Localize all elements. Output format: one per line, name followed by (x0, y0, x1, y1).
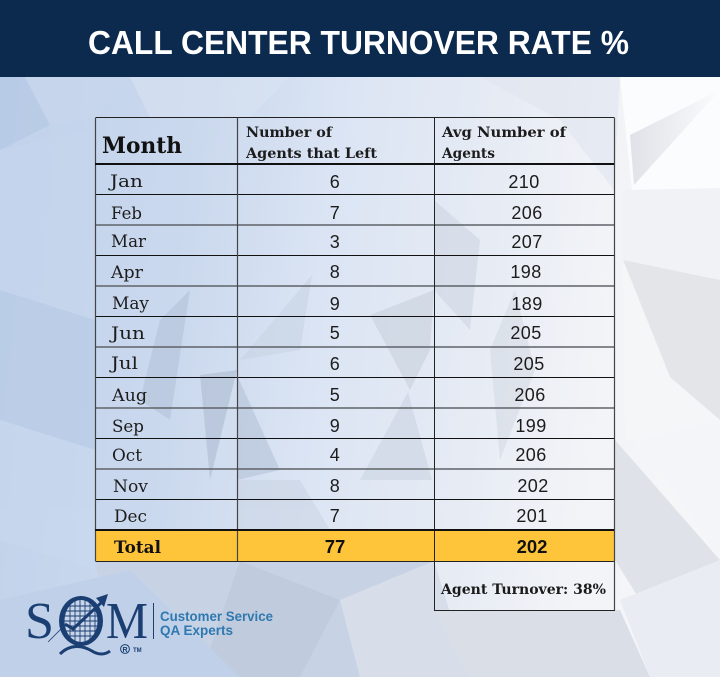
registered and trademark marks: TM (133, 648, 142, 654)
month rows: Mar (111, 232, 146, 251)
table header: Agents (441, 146, 495, 162)
registered and trademark marks (121, 645, 142, 654)
month rows: 9 (330, 294, 340, 314)
registered and trademark marks: R (122, 647, 128, 654)
title banner: CALL CENTER TURNOVER RATE % (88, 24, 629, 61)
total row: Total (114, 538, 162, 558)
SQM logo: QA Experts (160, 623, 233, 638)
month rows: 9 (330, 416, 340, 436)
month rows (108, 172, 549, 526)
table grid (95, 118, 615, 610)
month rows: 189 (511, 294, 543, 314)
month rows: 198 (510, 262, 542, 282)
month rows: 5 (330, 385, 340, 405)
month rows: 205 (510, 323, 542, 343)
month rows: 206 (511, 203, 543, 223)
logo letter M: M (106, 593, 148, 650)
total row (114, 536, 547, 558)
month rows: 207 (511, 232, 543, 252)
icon: globe with chart arrow (48, 594, 110, 654)
SQM logo (25, 593, 273, 654)
month rows: Apr (110, 263, 143, 282)
logo letter S: S (25, 593, 54, 650)
month rows: 199 (515, 416, 547, 436)
month rows: Nov (113, 477, 149, 496)
month rows: 201 (516, 506, 548, 526)
agent turnover callout: Agent Turnover: 38% (440, 582, 606, 598)
month rows: Feb (111, 204, 142, 223)
month rows: 206 (515, 445, 547, 465)
month rows: Oct (112, 446, 142, 465)
month rows: Dec (114, 507, 147, 526)
month rows: 8 (330, 262, 340, 282)
title banner (0, 0, 720, 77)
month rows: Aug (111, 386, 147, 405)
month rows: May (112, 294, 150, 313)
table header: Avg Number of (441, 125, 567, 141)
month rows: Jul (109, 354, 138, 373)
month rows: Jan (108, 172, 143, 191)
month rows: 5 (330, 323, 340, 343)
table header: Agents that Left (245, 146, 378, 162)
total row: 77 (325, 536, 345, 557)
month rows: Jun (109, 324, 145, 343)
month rows: 210 (508, 172, 540, 192)
month rows: 6 (330, 354, 340, 374)
month rows: 202 (517, 476, 549, 496)
month rows: 7 (330, 506, 340, 526)
month rows: 206 (514, 385, 546, 405)
table header: Number of (246, 125, 333, 141)
month rows: 205 (513, 354, 545, 374)
month rows: 7 (330, 203, 340, 223)
month rows: 6 (330, 172, 340, 192)
month rows: 3 (330, 232, 340, 252)
table header: Month (102, 133, 182, 159)
total row: 202 (517, 536, 547, 557)
table header (102, 125, 567, 162)
total row highlight (95, 531, 614, 561)
month rows: Sep (112, 417, 144, 436)
month rows: 4 (330, 445, 340, 465)
month rows: 8 (330, 476, 340, 496)
turnover table (95, 118, 615, 610)
logo tagline: Customer Service (160, 609, 273, 624)
